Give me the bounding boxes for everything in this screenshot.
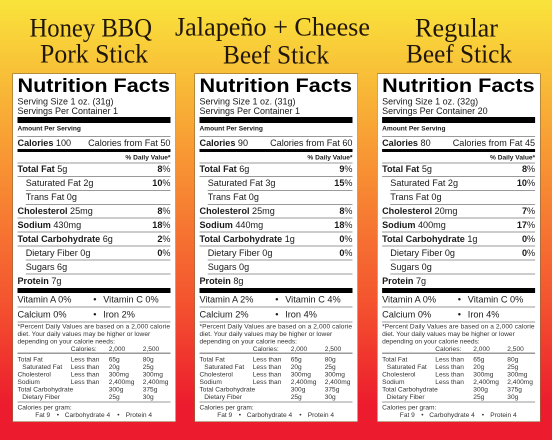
footnote: Calories: [253,346,279,353]
footnote: Total Fat [382,356,408,364]
nutrient rows [200,164,352,286]
footnote: Dietary Fiber [22,394,61,401]
footnote: depending on your calorie needs: [382,338,480,346]
footnote: diet. Your daily values may be higher or lower [382,331,516,338]
nutrient rows: 9% [339,164,352,174]
nutrient rows: Total Fat 6g [199,164,249,174]
nutrient rows: Cholesterol 20mg [382,206,457,216]
nutrient rows: 17% [517,220,535,230]
calories row [200,138,353,162]
footnote: Less than [253,372,282,378]
nutrient rows: 18% [152,220,171,230]
nutrient rows: Trans Fat 0g [26,192,77,202]
footnote: Protein 4 [126,412,152,419]
nutrient rows: Trans Fat 0g [208,192,259,202]
footnote: Less than [435,364,464,371]
footnote: 20g [109,364,120,371]
nutrient rows: Protein 7g [382,276,426,286]
nutrient rows: 0% [157,248,171,258]
footnote: diet. Your daily values may be higher or lower [18,331,151,338]
footnote: 300g [473,386,488,394]
nutrient rows: Sodium 400mg [382,220,446,230]
footnote: 2,400mg [507,379,533,386]
footnote: Less than [435,356,464,364]
serving info: Serving Size 1 oz. (31g) [199,96,296,106]
nutrient rows: Sugars 6g [26,262,67,272]
footnote: Sodium [199,379,222,386]
heading: Nutrition Facts: Nutrition Facts [382,75,535,97]
calories row: % Daily Value* [490,154,536,162]
footnote: *Percent Daily Values are based on a 2,000 calorie [199,324,352,330]
serving info: Servings Per Container 1 [199,106,300,116]
nutrient rows: Sugars 0g [208,262,249,272]
vitamins and minerals: Vitamin A 0% [18,294,71,304]
footnote: Less than [435,379,464,386]
footnote: Calories per gram: [199,404,254,412]
footnote: Fat 9 [400,412,415,419]
footnote: 25g [325,364,336,371]
nutrient rows: 7% [522,206,535,216]
calories row: % Daily Value* [125,154,171,162]
footnote: Cholesterol [382,372,416,378]
heading: Nutrition Facts: Nutrition Facts [199,75,352,97]
footnote: • [299,412,302,419]
nutrient rows: Protein 8g [199,276,243,286]
vitamins and minerals: Iron 4% [468,310,499,320]
serving info: Amount Per Serving [18,126,81,132]
footnote: Total Fat [199,356,225,364]
footnote: Saturated Fat [387,364,427,371]
footnote: 375g [507,386,522,394]
footnote: depending on your calorie needs: [18,338,115,346]
footnote: 80g [507,356,519,364]
footnote: Total Carbohydrate [382,386,438,394]
title: Regular Beef Stick: Regular [415,14,498,42]
serving info: Amount Per Serving [199,126,263,132]
footnote: 25g [109,394,120,401]
footnote [18,324,170,419]
serving info [200,96,300,132]
serving info: Amount Per Serving [382,126,445,132]
footnote: Dietary Fiber [204,394,243,401]
calories row: Calories from Fat 45 [453,138,535,148]
footnote: 2,000 [109,346,126,353]
nutrient rows: 0% [339,234,352,244]
footnote: Calories per gram: [18,404,72,412]
title: Regular Beef Stick: Beef Stick [406,40,512,68]
footnote: Less than [253,364,282,371]
nutrient rows: 0% [522,234,535,244]
footnote: *Percent Daily Values are based on a 2,000 calorie [382,324,535,330]
nutrient rows: 8% [157,164,171,174]
footnote: 300mg [109,372,129,378]
nutrient rows: 10% [517,178,535,188]
footnote: 2,000 [291,346,308,353]
footnote: 25g [291,394,302,401]
footnote: Protein 4 [490,412,517,419]
calories row: Calories from Fat 60 [270,138,352,148]
footnote: 300mg [291,372,311,378]
nutrient rows: 2% [157,234,171,244]
nutrient rows: Total Carbohydrate 1g [199,234,295,244]
nutrient rows: Cholesterol 25mg [199,206,275,216]
nutrient rows: 8% [339,206,352,216]
nutrient rows: Sugars 0g [390,262,432,272]
footnote: 2,400mg [325,379,351,386]
footnote: Calories: [435,346,461,353]
footnote: Fat 9 [217,412,233,419]
panel: Jalapeño + Cheese Beef Stick nutrition label [195,74,358,422]
vitamins and minerals: Vitamin A 0% [382,294,436,304]
nutrient rows: Total Carbohydrate 1g [382,234,477,244]
footnote: 2,500 [143,346,160,353]
vitamins and minerals: Vitamin C 0% [468,294,523,304]
vitamins and minerals: • [93,310,96,320]
footnote: Less than [435,372,464,378]
footnote: 30g [325,394,336,401]
vitamins and minerals [382,294,523,320]
serving info [18,96,118,132]
footnote: 375g [325,386,340,394]
footnote: Calories: [71,346,97,353]
footnote: • [117,412,120,419]
footnote: Sodium [18,379,40,386]
footnote: 65g [109,356,120,364]
vitamins and minerals: • [458,310,461,320]
vitamins and minerals: Calcium 0% [18,310,67,320]
footnote: Total Carbohydrate [199,386,256,394]
footnote: 2,400mg [291,379,317,386]
footnote: Dietary Fiber [387,394,425,401]
panel: Honey BBQ Pork Stick nutrition label [13,74,176,422]
serving info: Serving Size 1 oz. (32g) [382,96,478,106]
calories row: Calories 90 [199,138,248,148]
footnote: 375g [143,386,158,394]
serving info: Servings Per Container 20 [382,106,488,116]
footnote: • [482,412,485,419]
footnote: 300mg [473,372,494,378]
footnote: 300mg [507,372,528,378]
footnote [200,324,352,419]
footnote: 20g [473,364,485,371]
footnote: 2,400mg [143,379,169,386]
vitamins and minerals: Vitamin C 0% [103,294,159,304]
footnote: 300mg [325,372,345,378]
title: Jalapeño + Cheese Beef Stick: Beef Stick [223,40,329,70]
footnote: 20g [291,364,302,371]
footnote: diet. Your daily values may be higher or lower [199,331,333,338]
footnote: Saturated Fat [204,364,244,371]
footnote: Saturated Fat [22,364,62,371]
footnote: Carbohydrate 4 [429,412,475,419]
nutrient rows [18,164,170,286]
serving info: Servings Per Container 1 [18,106,118,116]
vitamins and minerals [200,294,341,320]
footnote: 25g [143,364,154,371]
vitamins and minerals [18,294,159,320]
nutrient rows: Saturated Fat 3g [208,178,275,188]
footnote: 30g [507,394,519,401]
title: Jalapeño + Cheese Beef Stick: Jalapeño + Cheese [175,12,370,42]
title: Honey BBQ Pork Stick: Pork Stick [40,40,148,68]
footnote: Fat 9 [35,412,51,419]
footnote: depending on your calorie needs: [199,338,297,346]
nutrient rows: Protein 7g [18,276,61,286]
footnote: Cholesterol [18,372,51,378]
footnote: Cholesterol [199,372,233,378]
footnote: 30g [143,394,154,401]
footnote: 25g [507,364,519,371]
nutrient rows: Dietary Fiber 0g [26,248,90,258]
footnote: 80g [325,356,336,364]
nutrient rows: Sodium 440mg [199,220,263,230]
footnote: Less than [71,364,100,371]
footnote: 2,400mg [473,379,499,386]
nutrient rows: 18% [334,220,352,230]
footnote: Carbohydrate 4 [247,412,292,419]
nutrient rows: 0% [339,248,352,258]
calories row: % Daily Value* [307,154,353,162]
nutrient rows [382,164,535,286]
footnote: Less than [71,379,100,386]
footnote: *Percent Daily Values are based on a 2,000 calorie [18,324,170,330]
vitamins and minerals: Calcium 2% [199,310,249,320]
footnote: Less than [71,372,100,378]
nutrient rows: Saturated Fat 2g [390,178,458,188]
calories row: Calories 80 [382,138,431,148]
title: Jalapeño + Cheese Beef Stick [175,12,370,70]
serving info [382,96,488,132]
footnote: 300g [109,386,124,394]
title: Honey BBQ Pork Stick [30,14,152,68]
nutrient rows: Saturated Fat 2g [26,178,93,188]
footnote: 300g [291,386,306,394]
footnote: • [421,412,424,419]
nutrient rows: Sodium 430mg [18,220,81,230]
nutrient rows: Cholesterol 25mg [18,206,93,216]
footnote [382,324,535,419]
vitamins and minerals: Iron 4% [285,310,317,320]
title: Regular Beef Stick [406,14,512,68]
nutrient rows: Total Carbohydrate 6g [18,234,113,244]
nutrient rows: Dietary Fiber 0g [390,248,455,258]
footnote: Less than [253,356,282,364]
footnote: 25g [473,394,485,401]
footnote: 65g [291,356,302,364]
title: Honey BBQ Pork Stick: Honey BBQ [30,14,152,42]
footnote: 2,000 [473,346,490,353]
vitamins and minerals: Vitamin C 4% [285,294,341,304]
footnote: 65g [473,356,485,364]
footnote: 2,500 [507,346,524,353]
footnote: Less than [253,379,282,386]
footnote: Total Fat [18,356,43,364]
calories row [18,138,171,162]
vitamins and minerals: Vitamin A 2% [199,294,253,304]
footnote: Total Carbohydrate [18,386,74,394]
calories row [382,138,536,162]
footnote: 80g [143,356,154,364]
footnote: Protein 4 [308,412,334,419]
vitamins and minerals: • [458,294,461,304]
footnote: Calories per gram: [382,404,437,412]
footnote: Sodium [382,379,405,386]
nutrient rows: Total Fat 5g [18,164,67,174]
nutrient rows: Dietary Fiber 0g [208,248,272,258]
heading: Nutrition Facts: Nutrition Facts [18,75,170,97]
nutrient rows: 0% [522,248,535,258]
footnote: • [239,412,242,419]
serving info: Serving Size 1 oz. (31g) [18,96,114,106]
nutrient rows: 8% [157,206,171,216]
nutrient rows: Trans Fat 0g [390,192,442,202]
footnote: 2,400mg [109,379,135,386]
nutrient rows: 15% [334,178,352,188]
vitamins and minerals: • [275,294,278,304]
vitamins and minerals: Iron 2% [103,310,135,320]
calories row: Calories from Fat 50 [88,138,171,148]
panel: Regular Beef Stick nutrition label [377,74,540,422]
nutrient rows: 10% [152,178,171,188]
footnote: Less than [71,356,100,364]
vitamins and minerals: Calcium 0% [382,310,431,320]
footnote: Carbohydrate 4 [65,412,110,419]
calories row: Calories 100 [18,138,71,148]
footnote: • [57,412,60,419]
nutrient rows: 8% [522,164,535,174]
vitamins and minerals: • [93,294,96,304]
footnote: 300mg [143,372,163,378]
vitamins and minerals: • [275,310,278,320]
footnote: 2,500 [325,346,342,353]
nutrient rows: Total Fat 5g [382,164,432,174]
